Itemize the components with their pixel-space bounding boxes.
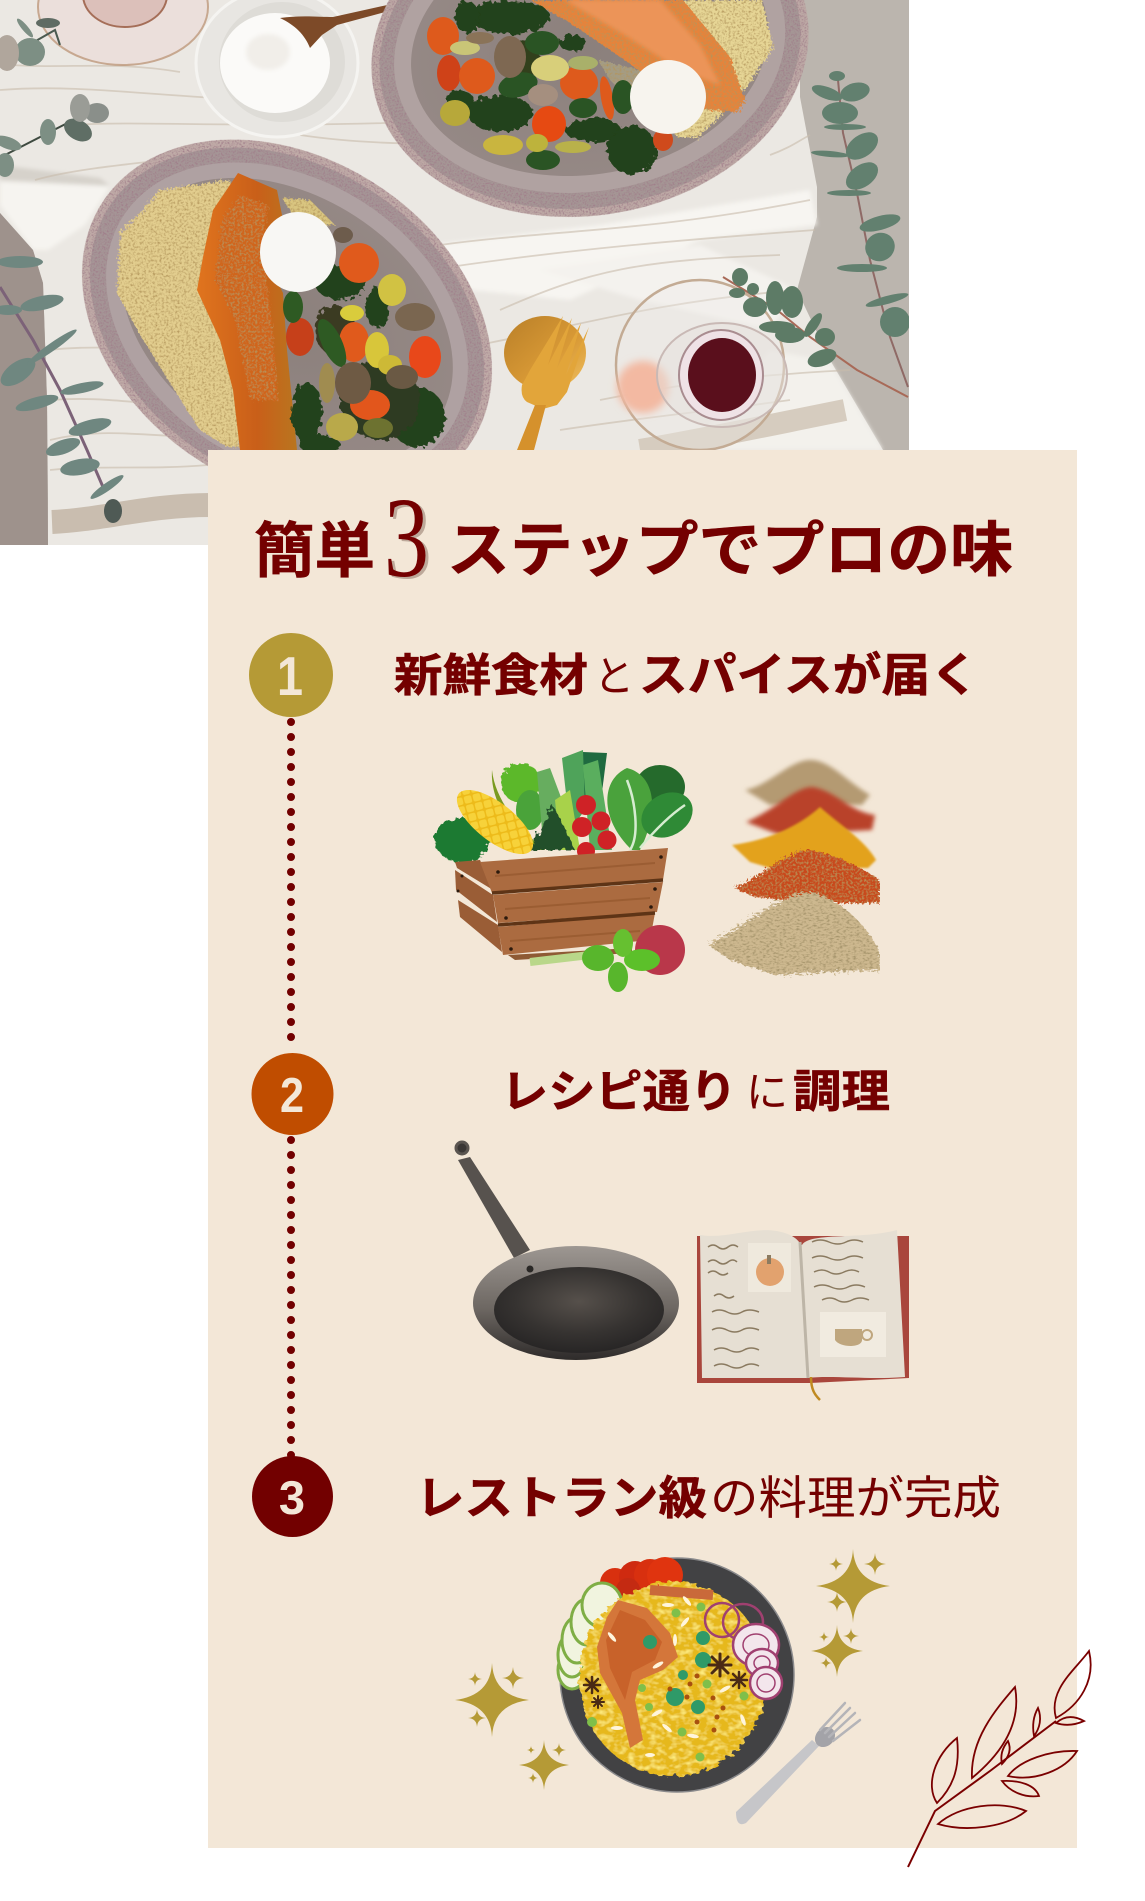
- heading: dish completed: の料理が完成: [710, 1472, 1001, 1524]
- table background: [0, 0, 909, 545]
- step 1 badge: 1: [277, 645, 303, 707]
- bottom plate yogurt: [260, 212, 336, 292]
- cloth stripes: [0, 64, 850, 470]
- tomato slices: [600, 1557, 683, 1602]
- top plate rice: [660, 0, 773, 138]
- icon: decorative leaf sprig: [908, 1651, 1091, 1867]
- red spice: [746, 787, 875, 835]
- dotted timeline: step 2 to 3: [287, 1140, 295, 1456]
- icon: sparkles right upper: [816, 1549, 890, 1623]
- herbs: [643, 1631, 711, 1714]
- cherry tomatoes: [572, 795, 616, 860]
- wooden spoon: [280, 5, 387, 48]
- title: katakana part: ステップでプロの味: [447, 517, 1013, 584]
- bookmark ribbon: [811, 1377, 820, 1400]
- cinnamon stick: [650, 1590, 713, 1595]
- bottom plate vegetables: [283, 227, 445, 455]
- book pages: [700, 1230, 905, 1378]
- title: numeral 3: 3: [384, 474, 429, 601]
- heading: as the recipe: レシピ通り: [501, 1066, 737, 1117]
- chicken leg: [597, 1600, 678, 1748]
- top plate yogurt: [630, 60, 706, 134]
- heading: fresh ingredients: 新鮮食材: [394, 650, 588, 701]
- icon: sparkles right lower: [811, 1625, 863, 1677]
- white rice grains: [607, 1595, 747, 1757]
- dark plate: [560, 1558, 794, 1792]
- star anise: [584, 1654, 747, 1708]
- step 1 heading: [394, 649, 979, 701]
- cucumber slices: [558, 1583, 622, 1689]
- step 3 badge: [252, 1456, 333, 1537]
- tomato: [635, 925, 685, 975]
- yellow rice: [579, 1582, 767, 1776]
- illustration: vegetable crate: [435, 750, 701, 992]
- illustration: plated dish: [558, 1557, 794, 1792]
- eucalyptus sprigs: [0, 17, 910, 523]
- orange spice: [734, 850, 880, 903]
- cloth folds: [0, 165, 883, 450]
- book picture: cup: [820, 1312, 886, 1357]
- step 2 badge: [252, 1053, 334, 1135]
- top plate vegetables: [427, 0, 673, 174]
- illustration: frying pan: [456, 1142, 679, 1360]
- book picture: pumpkin: [748, 1243, 791, 1292]
- step 2 heading: [501, 1066, 890, 1117]
- step 3 heading: [416, 1472, 1001, 1524]
- linen cloth: [0, 0, 900, 545]
- book squiggle text: [708, 1240, 869, 1368]
- icon: sparkles left lower: [519, 1740, 569, 1790]
- plate: top: [371, 0, 808, 218]
- dotted timeline: step 1 to 2: [287, 722, 295, 1052]
- illustration: spice piles: [708, 760, 880, 975]
- bottom plate rice: [115, 178, 240, 449]
- wide beige stripes: [52, 505, 210, 522]
- hero food photo: [0, 0, 910, 579]
- gold spoon and fork: [504, 316, 589, 450]
- onion slices: [705, 1603, 782, 1699]
- beige spice: [745, 760, 870, 805]
- step 3 badge: 3: [279, 1471, 305, 1524]
- corn: [447, 779, 543, 865]
- panel: steps background: [208, 450, 1077, 1848]
- bottom plate salmon: [197, 173, 297, 450]
- leafy greens: [435, 750, 701, 863]
- step 1 badge: [249, 633, 333, 717]
- peas: [587, 1602, 748, 1762]
- icon: fork: [736, 1703, 860, 1824]
- title: [254, 474, 1013, 603]
- glass bowl of yogurt: [196, 0, 358, 137]
- step 2 badge: 2: [280, 1069, 304, 1123]
- grey table corner: [0, 213, 48, 545]
- icon: sparkles left upper: [455, 1663, 529, 1737]
- illustration: recipe book: [697, 1230, 909, 1400]
- spice dots: [668, 1674, 726, 1732]
- heading: cook: 調理: [793, 1066, 890, 1117]
- heading: spices arrive: スパイスが届く: [639, 649, 979, 701]
- top left glass: [38, 0, 208, 65]
- heading: restaurant grade: レストラン級: [416, 1472, 707, 1524]
- yellow spice: [732, 807, 876, 868]
- plate: bottom left: [82, 140, 492, 466]
- seed pile: [708, 892, 880, 975]
- wooden crate: [455, 848, 668, 960]
- title: kanji part: 簡単: [254, 518, 375, 585]
- heading: and: と: [594, 653, 634, 700]
- tea glass: [616, 280, 787, 450]
- book cover: [697, 1236, 909, 1383]
- basil and stem: [530, 929, 660, 992]
- heading: particle: に: [746, 1069, 788, 1116]
- title: numeral 3 shadow: 3: [387, 476, 432, 603]
- top plate salmon: [530, 0, 745, 112]
